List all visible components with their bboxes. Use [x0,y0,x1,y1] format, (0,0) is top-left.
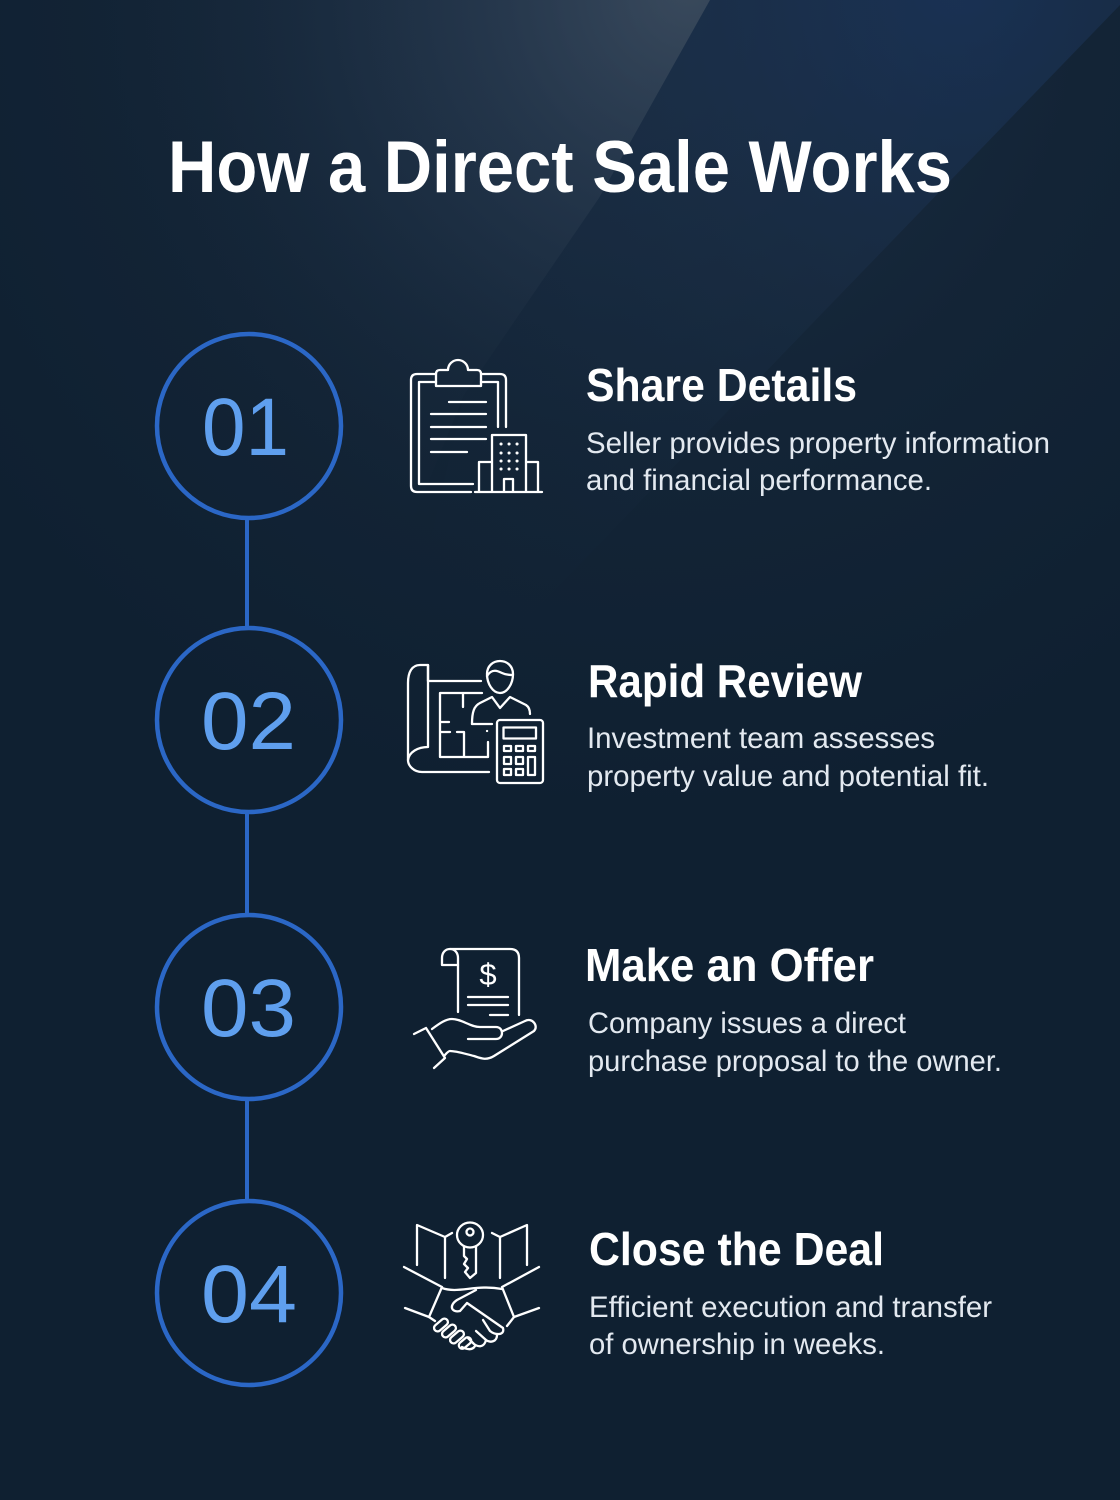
step 3 number badge [157,915,341,1099]
step 4 description: of ownership in weeks. [589,1328,885,1361]
step 2 [157,628,989,812]
step 2 number badge [157,628,341,812]
step 3 description: Company issues a direct [588,1007,907,1040]
step 2 description: Investment team assesses [587,722,935,755]
step 1 [157,334,1050,518]
step 3 description [588,1007,1002,1078]
step 4 number badge: 04 [201,1249,297,1340]
step 1 description: Seller provides property information [586,427,1050,460]
step 4 [157,1201,992,1385]
icon: document with dollar sign over open hand: $ [479,957,497,992]
step 2 description: property value and potential fit. [587,760,989,793]
step 3 [157,915,1002,1099]
icon: key, doors and handshake [404,1222,539,1350]
step 4 description: Efficient execution and transfer [589,1291,992,1324]
step 3 heading: Make an Offer [585,939,874,991]
icon: document with dollar sign over open hand [414,949,536,1068]
step 1 description [586,427,1050,497]
step 1 heading: Share Details [586,359,857,411]
step 1 description: and financial performance. [586,464,932,497]
step 3 description: purchase proposal to the owner. [588,1045,1002,1078]
step 3 number badge: 03 [201,963,296,1054]
step 4 number badge [157,1201,341,1385]
icon: clipboard and building [411,360,542,492]
step 2 description [587,722,989,793]
title: How a Direct Sale Works [168,127,952,208]
step 1 number badge: 01 [202,382,289,473]
step 1 number badge [157,334,341,518]
step 2 heading: Rapid Review [588,655,862,707]
icon: floor plan, person and calculator [408,661,543,783]
step 4 description [589,1291,992,1361]
timeline connectors [245,518,249,1201]
step 2 number badge: 02 [201,676,296,767]
step 4 heading: Close the Deal [589,1223,884,1275]
